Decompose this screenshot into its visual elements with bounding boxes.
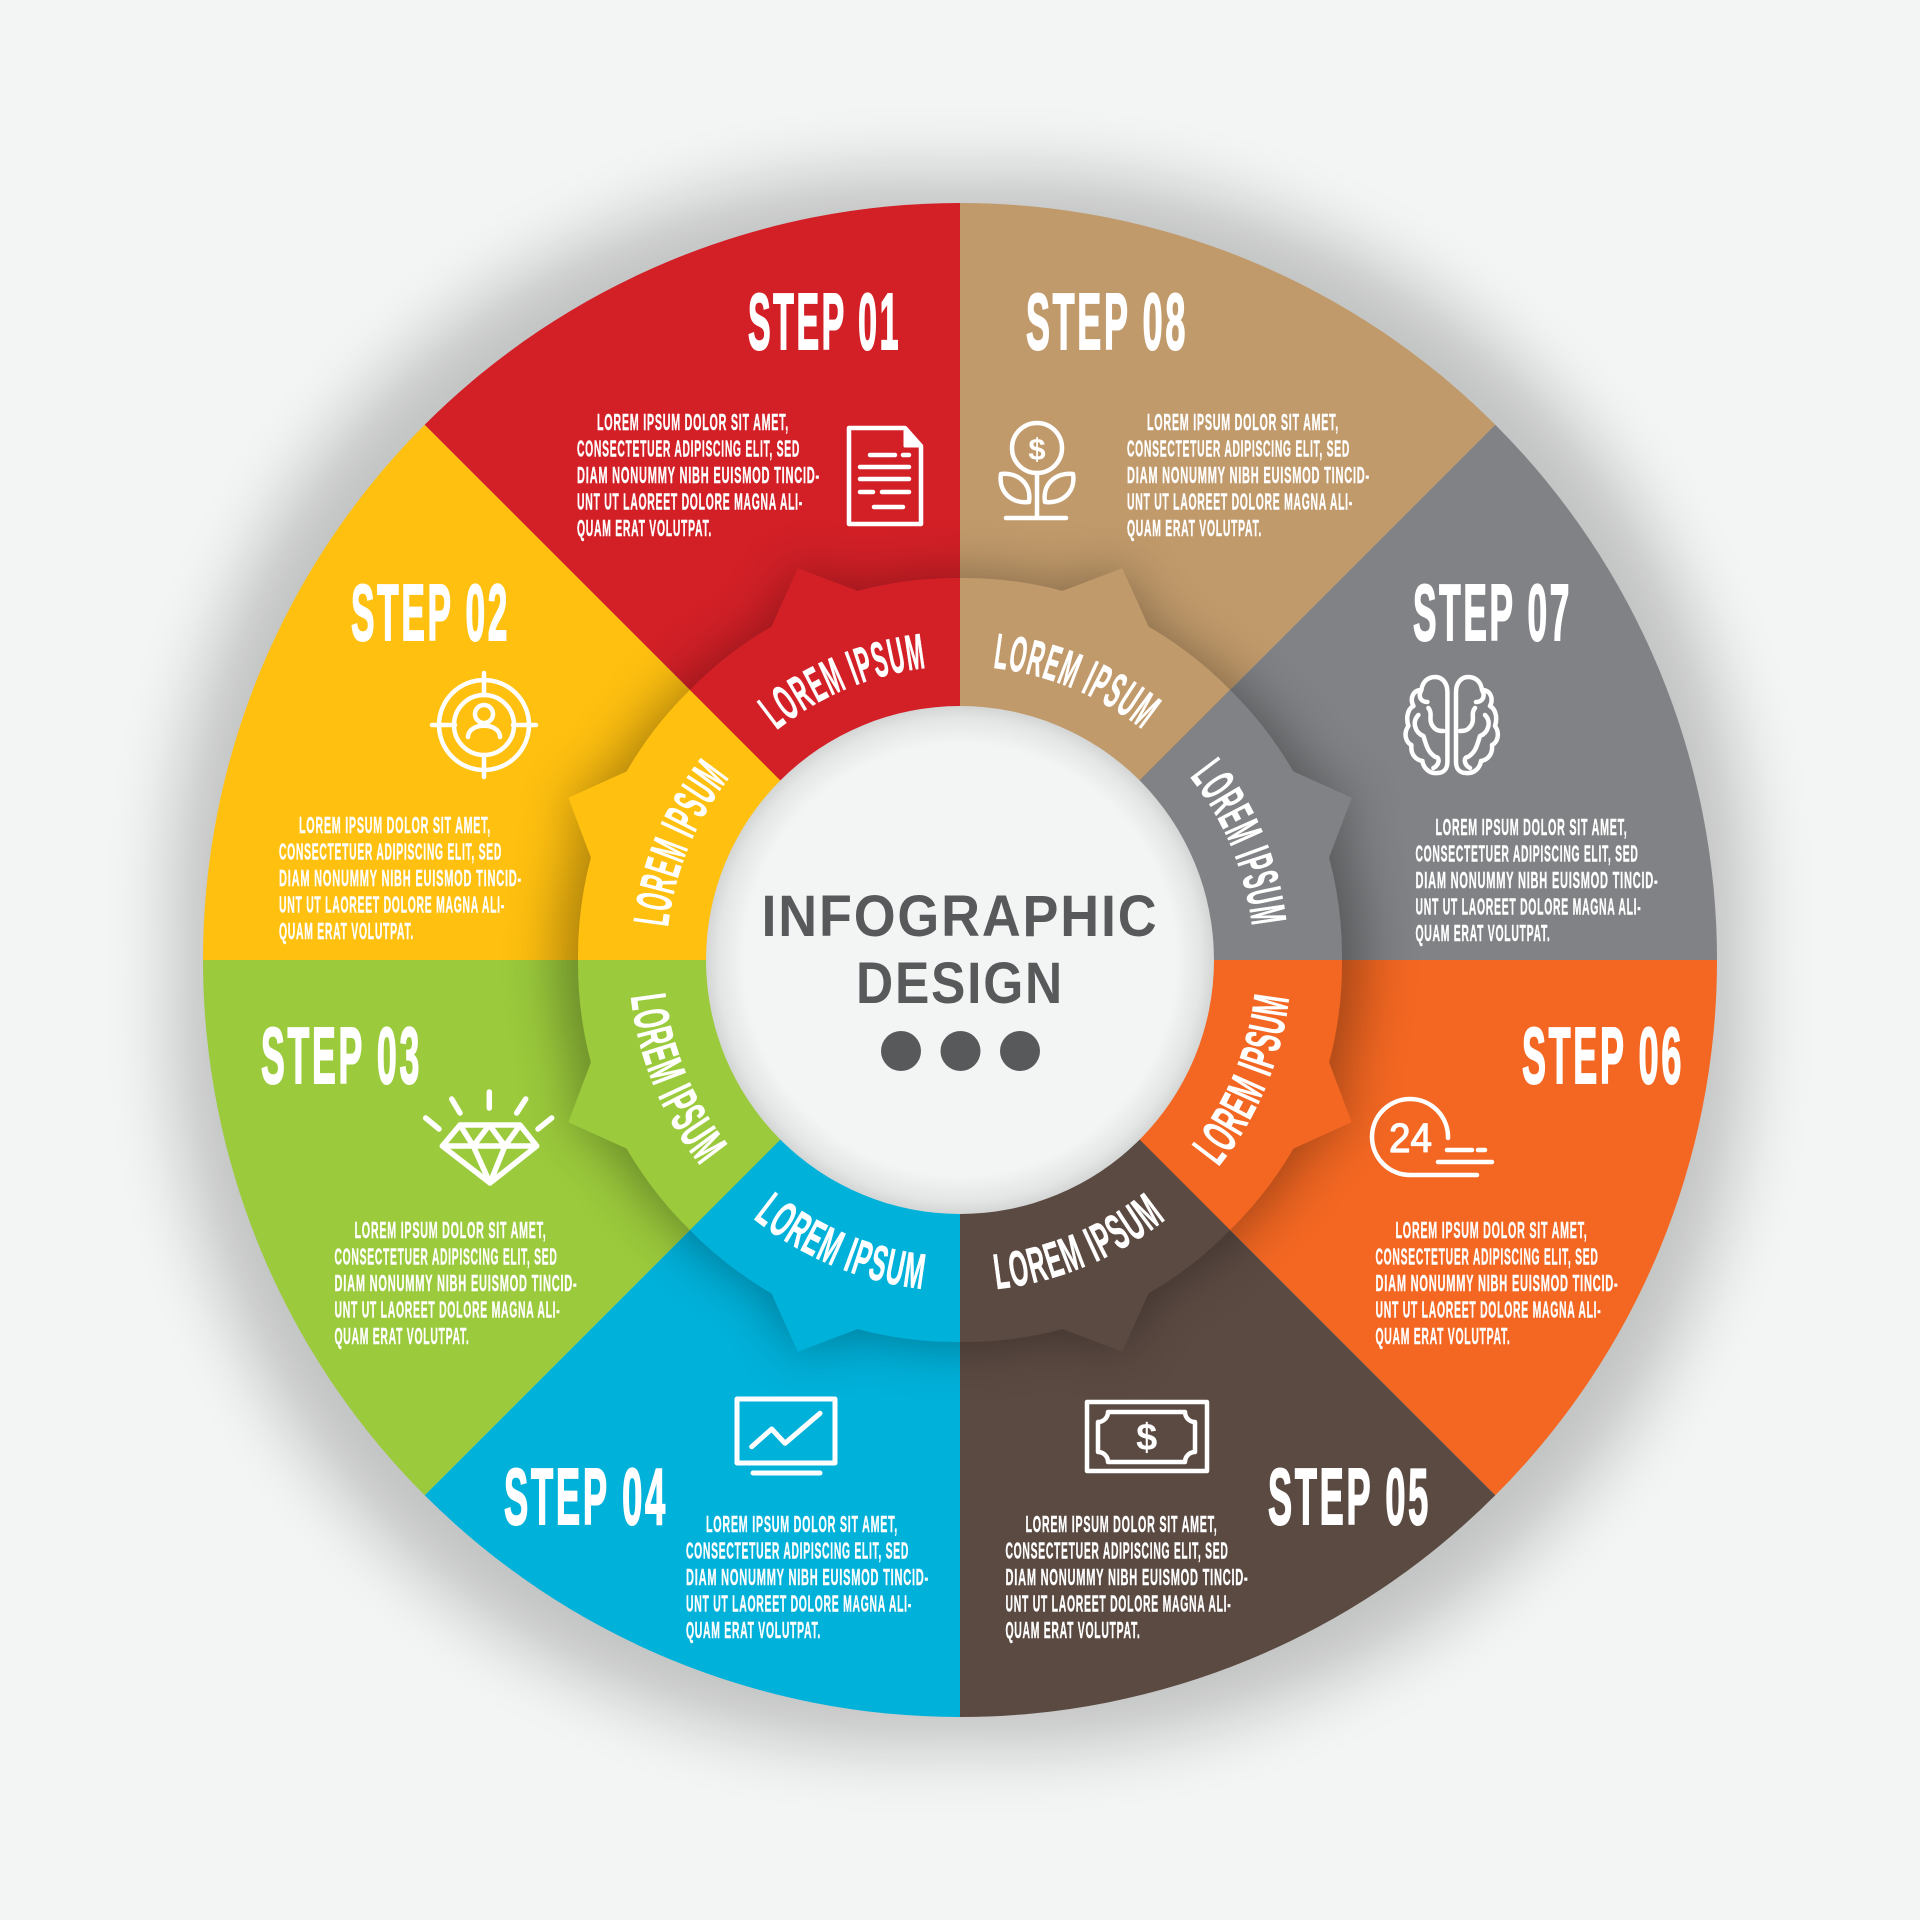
text block: step 05: QUAM ERAT VOLUTPAT. <box>1006 1617 1140 1643</box>
sector: step 04 <box>425 960 960 1717</box>
ring label: orange: LOREM IPSUM <box>1192 994 1290 1166</box>
icon: monitor chart <box>737 1399 835 1473</box>
gear segment: red <box>683 492 1026 835</box>
icon: 24 hours: 24 <box>1389 1115 1432 1161</box>
text block: step 08: LOREM IPSUM DOLOR SIT AMET, <box>1147 409 1339 435</box>
gear shadow <box>492 492 1428 1428</box>
title: DESIGN <box>856 951 1064 1016</box>
icon: target person <box>432 673 536 777</box>
text: CONSECTETUER ADIPISCING ELIT, SED <box>1376 1244 1598 1270</box>
text: DIAM NONUMMY NIBH EUISMOD TINCID- <box>279 865 522 891</box>
text block: step 02: QUAM ERAT VOLUTPAT. <box>279 918 414 944</box>
ring labels <box>630 634 1290 1290</box>
text block: step 04: LOREM IPSUM DOLOR SIT AMET, <box>706 1511 898 1537</box>
sector: step 06 <box>960 960 1717 1495</box>
gear segment: blue <box>690 1137 960 1352</box>
icon: dollar bill: $ <box>1136 1417 1157 1459</box>
gear segment: orange <box>1137 960 1352 1230</box>
gear segment: brown <box>894 1085 1237 1428</box>
text: UNT UT LAOREET DOLORE MAGNA ALI- <box>1376 1297 1602 1323</box>
text block: step 08: QUAM ERAT VOLUTPAT. <box>1127 515 1262 541</box>
text block: step 03 <box>334 1217 578 1349</box>
text block: step 07 <box>1416 814 1658 946</box>
text: STEP 01 <box>748 277 901 366</box>
text block: step 05: LOREM IPSUM DOLOR SIT AMET, <box>1026 1511 1218 1537</box>
text: DIAM NONUMMY NIBH EUISMOD TINCID- <box>1376 1270 1618 1296</box>
panel: outer wheel sectors <box>203 203 1717 1717</box>
ring label: brown: LOREM IPSUM <box>993 1192 1165 1290</box>
title <box>762 884 1158 1016</box>
text: STEP 05 <box>1268 1452 1431 1541</box>
icon: document <box>849 428 921 524</box>
text: STEP 07 <box>1413 568 1572 657</box>
center circle <box>706 706 1214 1214</box>
icon: money plant <box>1001 423 1073 518</box>
text: CONSECTETUER ADIPISCING ELIT, SED <box>1416 841 1638 867</box>
text block: step 05 <box>1006 1511 1248 1643</box>
sector: step 03 <box>203 960 960 1495</box>
gear segment: yellow <box>568 690 783 960</box>
text block: step 01: LOREM IPSUM DOLOR SIT AMET, <box>597 409 789 435</box>
text: UNT UT LAOREET DOLORE MAGNA ALI- <box>334 1297 560 1323</box>
sector: step 02 <box>203 425 960 960</box>
gear segment: tan <box>960 568 1230 783</box>
disc drop shadow <box>173 173 1747 1747</box>
gear segment: gray <box>1085 683 1428 1026</box>
text: DIAM NONUMMY NIBH EUISMOD TINCID- <box>1127 462 1370 488</box>
ring label: gray: LOREM IPSUM <box>1190 756 1286 925</box>
title: INFOGRAPHIC <box>762 884 1158 949</box>
three dots <box>881 1031 1040 1071</box>
text block: step 01: QUAM ERAT VOLUTPAT. <box>577 515 712 541</box>
text block: step 04: QUAM ERAT VOLUTPAT. <box>686 1617 821 1643</box>
ring label: tan: LOREM IPSUM <box>994 634 1162 729</box>
text block: step 02: LOREM IPSUM DOLOR SIT AMET, <box>299 812 491 838</box>
text: DIAM NONUMMY NIBH EUISMOD TINCID- <box>1006 1564 1248 1590</box>
icon: money plant: $ <box>1028 432 1046 466</box>
icon: diamond <box>426 1092 552 1183</box>
text: CONSECTETUER ADIPISCING ELIT, SED <box>1127 436 1350 462</box>
text: UNT UT LAOREET DOLORE MAGNA ALI- <box>686 1591 912 1617</box>
text block: step 06 <box>1376 1217 1618 1349</box>
sector: step 01 <box>425 203 960 960</box>
panel: inner gear ring <box>492 492 1428 1428</box>
text block: step 06: QUAM ERAT VOLUTPAT. <box>1376 1323 1510 1349</box>
text: CONSECTETUER ADIPISCING ELIT, SED <box>1006 1538 1228 1564</box>
text: CONSECTETUER ADIPISCING ELIT, SED <box>279 839 502 865</box>
text block: step 08 <box>1127 409 1370 541</box>
text: UNT UT LAOREET DOLORE MAGNA ALI- <box>577 489 803 515</box>
text block: step 07: LOREM IPSUM DOLOR SIT AMET, <box>1436 814 1628 840</box>
text block: step 01 <box>577 409 820 541</box>
text: STEP 06 <box>1522 1011 1684 1100</box>
text block: step 06: LOREM IPSUM DOLOR SIT AMET, <box>1396 1217 1588 1243</box>
text: CONSECTETUER ADIPISCING ELIT, SED <box>577 436 800 462</box>
text block: step 02 <box>279 812 522 944</box>
text: CONSECTETUER ADIPISCING ELIT, SED <box>334 1244 558 1270</box>
sector: step 05 <box>960 960 1495 1717</box>
text: DIAM NONUMMY NIBH EUISMOD TINCID- <box>686 1564 929 1590</box>
sector: step 08 <box>960 203 1495 960</box>
text: UNT UT LAOREET DOLORE MAGNA ALI- <box>1006 1591 1232 1617</box>
ring label: green: LOREM IPSUM <box>630 993 728 1165</box>
icon: dollar bill <box>1087 1402 1207 1471</box>
text: STEP 08 <box>1026 277 1188 366</box>
text: UNT UT LAOREET DOLORE MAGNA ALI- <box>279 892 505 918</box>
gear segment: green <box>492 894 835 1237</box>
text block: step 07: QUAM ERAT VOLUTPAT. <box>1416 920 1550 946</box>
text: CONSECTETUER ADIPISCING ELIT, SED <box>686 1538 909 1564</box>
ring label: yellow: LOREM IPSUM <box>634 758 729 926</box>
text: DIAM NONUMMY NIBH EUISMOD TINCID- <box>577 462 820 488</box>
text block: step 03: LOREM IPSUM DOLOR SIT AMET, <box>354 1217 546 1243</box>
text: DIAM NONUMMY NIBH EUISMOD TINCID- <box>334 1270 578 1296</box>
sector: step 07 <box>960 425 1717 960</box>
text: STEP 03 <box>261 1011 422 1100</box>
text: UNT UT LAOREET DOLORE MAGNA ALI- <box>1127 489 1353 515</box>
icon: 24 hours <box>1372 1099 1492 1175</box>
text: STEP 02 <box>351 568 510 657</box>
text: STEP 04 <box>504 1452 668 1541</box>
text block: step 04 <box>686 1511 929 1643</box>
text: UNT UT LAOREET DOLORE MAGNA ALI- <box>1416 894 1642 920</box>
text: DIAM NONUMMY NIBH EUISMOD TINCID- <box>1416 867 1658 893</box>
text block: step 03: QUAM ERAT VOLUTPAT. <box>334 1323 470 1349</box>
ring label: red: LOREM IPSUM <box>756 634 925 730</box>
icon: brain <box>1406 677 1498 773</box>
ring label: blue: LOREM IPSUM <box>754 1192 926 1290</box>
